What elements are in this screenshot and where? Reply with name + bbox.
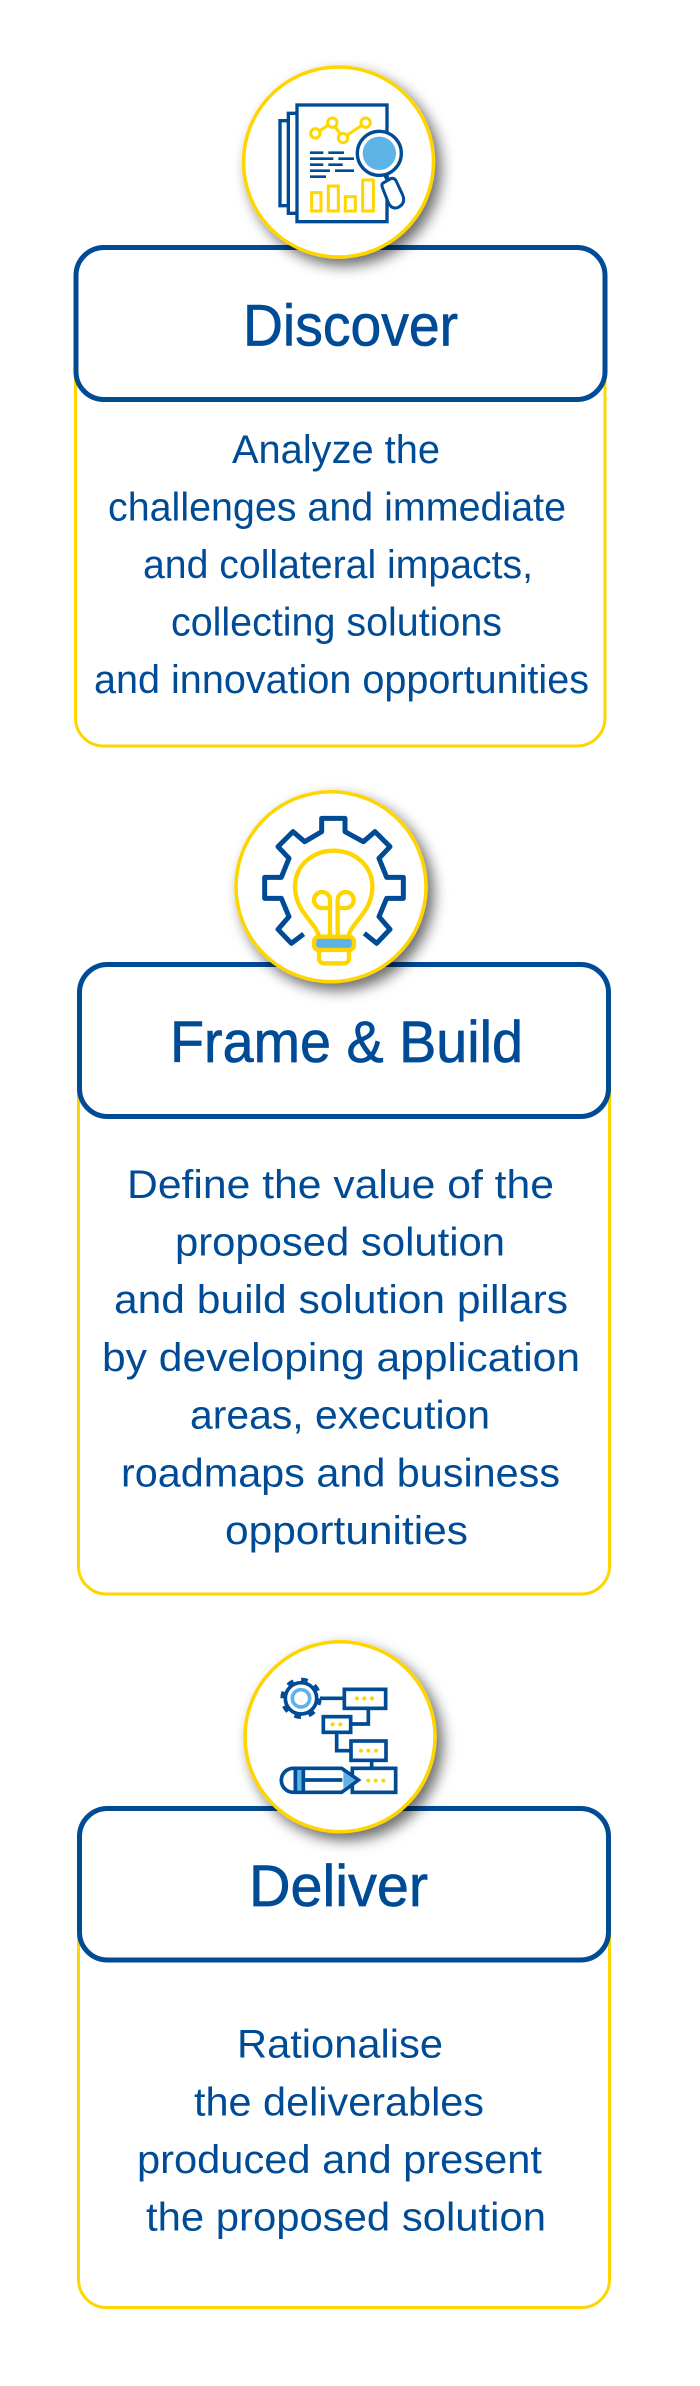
deliver body box [78, 1860, 610, 2308]
panel: frame and build [78, 792, 610, 1594]
frame and build description: opportunities [225, 1509, 468, 1553]
deliver description: the proposed solution [146, 2196, 546, 2240]
panel: discover [76, 67, 605, 746]
frame and build description: proposed solution [175, 1221, 505, 1265]
deliver header box [80, 1808, 608, 1960]
deliver heading: Deliver [249, 1854, 428, 1919]
frame and build description: areas, execution [190, 1394, 490, 1438]
icon: report with magnifier [244, 67, 434, 257]
frame and build header box [80, 964, 608, 1116]
frame and build body box [78, 1020, 610, 1594]
frame and build description: by developing application [102, 1336, 580, 1380]
discover description: Analyze the [232, 428, 440, 472]
discover description [94, 428, 589, 702]
discover header box [76, 248, 605, 400]
deliver description: Rationalise [237, 2022, 443, 2066]
frame and build description: roadmaps and business [121, 1451, 560, 1495]
frame and build description: and build solution pillars [114, 1278, 568, 1322]
discover description: and innovation opportunities [94, 658, 589, 702]
icon: gear and light bulb [236, 792, 426, 982]
deliver description: produced and present [137, 2138, 542, 2182]
discover body box [76, 300, 605, 746]
deliver description: the deliverables [194, 2080, 484, 2124]
discover description: collecting solutions [171, 600, 502, 644]
deliver description [137, 2022, 546, 2240]
panel: deliver [78, 1642, 610, 2308]
discover heading: Discover [243, 294, 458, 358]
icon: gear, flow chart and pencil [245, 1642, 435, 1832]
frame and build heading: Frame & Build [170, 1010, 523, 1075]
frame and build description [102, 1163, 580, 1553]
frame and build description: Define the value of the [127, 1163, 554, 1207]
discover description: and collateral impacts, [143, 543, 533, 587]
discover description: challenges and immediate [108, 486, 566, 530]
